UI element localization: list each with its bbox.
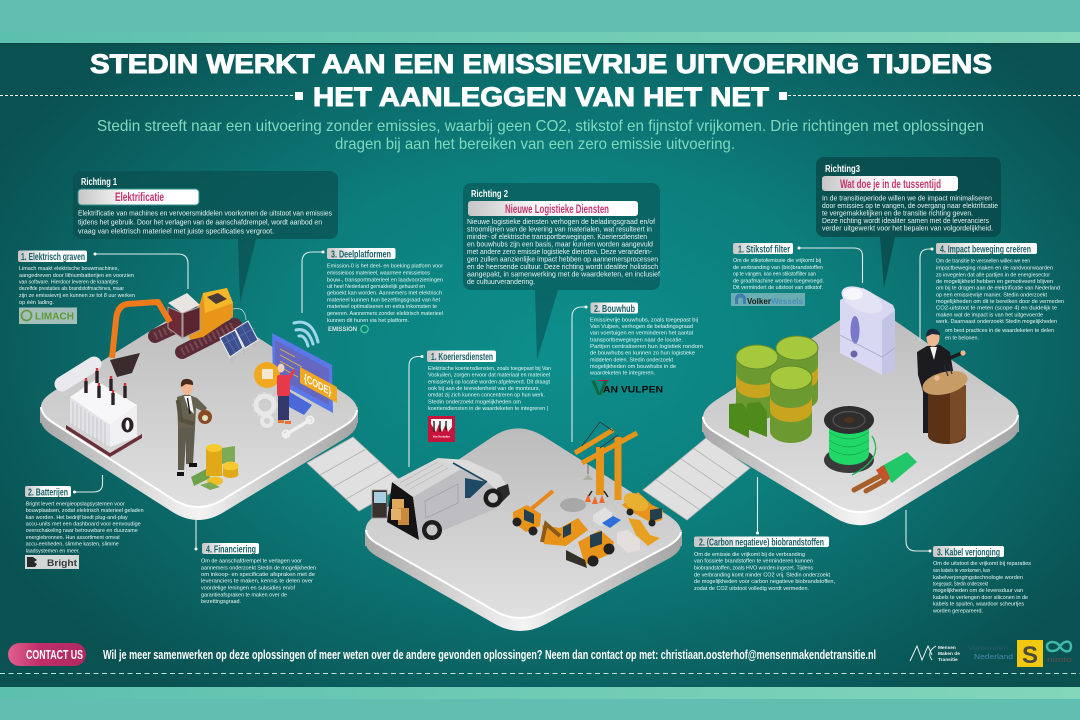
logo: Bright (25, 555, 79, 569)
footer logos: S (1022, 642, 1038, 669)
block: 3. Deelplatformen (302, 248, 443, 324)
block: 4. Financiering: garantieafspraken te maken over de (201, 592, 287, 598)
block: 1. Stikstof filter (733, 243, 862, 291)
block: 4. Impact beweging creëren: zo invegelen dat alle partijen in de energiesector (936, 272, 1050, 278)
logo: Van Vulpen (591, 377, 663, 400)
callout: richting 1: Elektrificatie (115, 192, 164, 204)
block: 3. Kabel verjonging: kabels te spuiten, waardoor scheurtjes (933, 602, 1024, 608)
icon: excavator (110, 288, 235, 377)
block: 3. Deelplatformen: geboekt kan worden. Aannemers met elektrisch (327, 291, 442, 297)
icon: wifi (294, 322, 318, 346)
block: 1. Koeriersdiensten: Stedin onderzoekt mogelijkheden om (428, 399, 521, 405)
platform: right (702, 311, 1019, 525)
block: 2. (Carbon negatieve) biobrandstoffen: 2. (Carbon negatieve) biobrandstoffen (699, 538, 824, 549)
logo: Emission (328, 325, 368, 333)
block: 4. Financiering: leveranciers te maken, kennis te delen over (201, 579, 313, 585)
block: 3. Kabel verjonging: Om de uitstoot die vrijkomt bij reparaties (933, 561, 1031, 567)
logo: Van Vulpen: AN VULPEN (603, 384, 663, 396)
block: 2. Bouwhub: van voertuigen en verminderen het aantal (590, 331, 693, 337)
callout: richting 2: Richting 2 (471, 188, 508, 200)
block: 1. Elektrisch graven (18, 250, 188, 306)
title: HET AANLEGGEN VAN HET NET (313, 82, 770, 112)
callout: richting 1: Elektrificatie van machines en vervoersmiddelen voorkomen de uitstoot van emissies (78, 208, 332, 218)
footer logos: Maken de (938, 651, 960, 657)
block: 2. Batterijen: bouwplaatsen, zodat elektrisch materieel geladen (26, 508, 144, 514)
callout: richting 3: verder uitgewerkt voor het bepalen van volgordelijkheid. (822, 224, 993, 232)
block: 4. Impact beweging creëren: om best practices in de waardeketen te delen (945, 328, 1054, 334)
callout: richting 3 (816, 157, 1001, 288)
block: 3. Kabel verjonging: kabels te verlengen door siliconen in de (933, 595, 1028, 601)
block: 1. Elektrisch graven: van software. Hierdoor leveren de kraantjes (19, 280, 118, 286)
block: 3. Deelplatformen: materieel kunnen hun bezettingsgraad van het (327, 298, 440, 304)
callout: richting 3: Wat doe je in de tussentijd (840, 179, 941, 191)
platform: middle (365, 428, 682, 631)
block: 4. Financiering: om inkoop- en specificatie afspraken met de (201, 572, 315, 578)
logo: VolkerWessels: Volker (747, 297, 771, 306)
block: 4. Financiering: voordelige leningen en subsidies en/of (201, 585, 295, 591)
block: 4. Financiering: bezettingsgraad. (201, 599, 241, 605)
block: 1. Koeriersdiensten: ook bij aan de tevredenheid van de monteurs, (428, 386, 540, 392)
callout: richting 3: te vergemakkelijken en de transitie richting geven. (822, 208, 973, 218)
block: 4. Impact beweging creëren: om bij te dragen aan de elektrificatie van Nederland (936, 286, 1060, 292)
block: 2. Batterijen: laadsystemen en meer. (26, 549, 80, 555)
block: 1. Koeriersdiensten: Elektrische koeriersdiensten, zoals toegepast bij Van (428, 366, 551, 372)
block: 4. Financiering: aannemers onderzoekt Stedin de mogelijkheden (201, 565, 316, 571)
block: 1. Stikstof filter: de verbranding van (bio)brandstoffen (733, 265, 823, 271)
block: 1. Elektrisch graven: Limach maakt elektrische bouwmachines, (19, 266, 119, 272)
block: 2. (Carbon negatieve) biobrandstoffen (694, 477, 835, 592)
callout: richting 2 (463, 183, 661, 360)
block: 4. Impact beweging creëren: mogelijkheden om dit te bereiken door de vermeden (936, 299, 1064, 305)
logo: Bright: Bright (47, 558, 78, 569)
callout: richting 2: en de heersende cultuur. Deze richting wordt idealiter holistisch (467, 262, 658, 271)
block: 3. Deelplatformen: Emission-0 is het deel- en boeking platform voor (327, 264, 443, 270)
block: 4. Impact beweging creëren: Om de transitie te versnellen willen we een (936, 258, 1030, 264)
icon: tower cranes (575, 422, 637, 500)
block: 2. Batterijen: energiebronnen. Hun assortiment omvat (26, 535, 120, 541)
icon: construction materials and cones (560, 494, 621, 528)
block: 2. Batterijen: Bright levert energieopslagsystemen voor (26, 501, 125, 507)
block: 3. Kabel verjonging: worden gerepareerd. (932, 608, 983, 614)
block: 3. Deelplatformen: uit heel Nederland gemakkelijk gehuurd en (327, 284, 425, 290)
contact button (8, 643, 86, 666)
block: 2. Bouwhub: waardeketen te integreren. (589, 371, 655, 377)
callout: richting 3: door emissies op te vangen, de overgang naar elektrificatie (822, 201, 998, 210)
callout: richting 2: aangepakt, in samenwerking met de waardeketen, en inclusief (467, 270, 661, 278)
logo: Limach (19, 308, 77, 324)
logo: Van Voskuilen: Van Voskuilen (433, 434, 451, 438)
callout: richting 2: Nieuwe Logistieke Diensten (505, 204, 609, 216)
icon: monitor with code: {CODE} (304, 372, 332, 399)
callout: richting 2: gen zullen aanzienlijke impact hebben op aannemersprocessen (467, 254, 658, 264)
block: 1. Stikstof filter: Om de stikstofemissie die vrijkomt bij (733, 258, 821, 264)
platform: left (40, 308, 358, 520)
block: 3. Deelplatformen: 3. Deelplatformen (331, 250, 391, 260)
block: 4. Impact beweging creëren: werk. Daarnaast onderzoekt Stedin mogelijkheden (935, 319, 1057, 325)
block: 2. Bouwhub: transportbewegingen naar de locatie. (590, 337, 683, 343)
block: 1. Elektrisch graven: op één lading. (19, 300, 54, 306)
block: 4. Impact beweging creëren: en te belonen. (945, 335, 979, 341)
block: 3. Deelplatformen: kunnen dit huren via het platform. (327, 318, 409, 324)
block: 4. Impact beweging creëren: impactbeweging maken en de randvoorwaarden (936, 265, 1053, 271)
callout: richting 3: Richting3 (825, 163, 860, 175)
block: 1. Elektrisch graven: dezelfde prestaties als brandstofmachines, maar (19, 286, 124, 292)
callout: richting 2: minder- of elektrische transportbewegingen. Koeriersdiensten (467, 232, 647, 241)
block: 1. Koeriersdiensten: emissievrij op locatie worden afgeleverd. Dit draagt (428, 379, 550, 385)
block: 3. Kabel verjonging: toegepast. Stedin onderzoekt (933, 582, 988, 588)
callout: richting 1: tijdens het gebruik. Door het verlagen van de aanschafdrempel, wordt aanbod en (78, 218, 322, 226)
block: 2. (Carbon negatieve) biobrandstoffen: van fossiele brandstoffen te verminderen kunnen (694, 559, 813, 565)
block: 3. Deelplatformen: emissieloos materieel, waarmee emissieloos (327, 270, 430, 276)
footer logos (0, 640, 1080, 674)
icon: fuel barrels (729, 336, 818, 443)
footer logos: Nederland (974, 654, 1013, 661)
footer logos: nimto (1047, 657, 1072, 664)
callout: richting 2: Nieuwe logistieke diensten verhogen de beladingsgraad en/of (467, 217, 656, 226)
icon: businessman with money bag (177, 379, 212, 476)
block: 1. Koeriersdiensten: koeriersdiensten in de waardeketen te integreren | (428, 406, 548, 412)
block: 1. Elektrisch graven: zijn ze emissievrij en kunnen ze tot 8 uur werken (19, 293, 135, 299)
block: 2. (Carbon negatieve) biobrandstoffen: de verbranding komt minder CO2 vrij. Stedin onderzoekt (694, 572, 830, 578)
block: 4. Impact beweging creëren: de mogelijkheid hebben en gemotiveerd blijven (936, 279, 1053, 285)
icon: cable spool (824, 406, 876, 475)
block: 4. Financiering: Om de aanschafdrempel te verlagen voor (201, 559, 302, 565)
icon: speaker at podium (917, 329, 970, 444)
callout: richting 2: en bouwhubs zijn een basis, maar kunnen worden aangevuld (467, 240, 653, 248)
block: 4. Impact beweging creëren: CO2-uitstoot te meten (scope 4) en duidelijk te (936, 306, 1057, 312)
block: 1. Koeriersdiensten: omdat zij zich kunnen concentreren op hun werk. (428, 393, 545, 399)
block: 2. (Carbon negatieve) biobrandstoffen: zodat de CO2 uitstoot volledig wordt vermeden. (694, 586, 809, 592)
logo: Emission: EMISSION (328, 327, 357, 333)
block: 2. (Carbon negatieve) biobrandstoffen: Om de emissie die vrijkomt bij de verbranding (694, 552, 805, 558)
block: 2. Batterijen: kan worden. Het bedrijf biedt plug-and-play (26, 515, 128, 521)
block: 3. Kabel verjonging: van kabels te voorkomen, kan (933, 568, 990, 574)
block: 2. Bouwhub: 2. Bouwhub (594, 304, 635, 315)
icon: cable cross-section (854, 452, 917, 491)
callout: richting 2: de cultuurverandering. (467, 277, 535, 286)
callout: richting 1: vraag van elektrisch materieel met juiste specificaties vergroot. (78, 226, 274, 236)
block: 2. Bouwhub: middelen delen. Stedin onderzoekt (590, 357, 673, 363)
block: 2. Batterijen: accu-units met een dashboard voor eenvoudige (26, 522, 141, 528)
callout: richting 2: stroomlijnen van de levering van materialen, wat resulteert in (467, 224, 652, 234)
block: 3. Kabel verjonging: 3. Kabel verjonging (937, 548, 1000, 558)
block: 2. Bouwhub (572, 302, 703, 442)
block: 1. Stikstof filter: op te vangen, kan een stikstoffilter aan (733, 272, 816, 278)
callout: richting 3: Deze richting wordt idealiter samen met de leveranciers (822, 216, 989, 225)
contact button: CONTACT US (26, 648, 83, 662)
block: 2. Bouwhub: Partijen centraliseren hun logistiek rondom (590, 344, 703, 350)
subtitle (97, 118, 984, 153)
block: 2. Batterijen: accu-eenheden, slimme kasten, slimme (26, 542, 119, 548)
block: 1. Stikstof filter: de graafmachine worden toegevoegd. (733, 278, 824, 284)
callout: richting 3: In de transitieperiode willen we de impact minimaliseren (822, 194, 992, 202)
block: 3. Kabel verjonging: mogelijkheden om de levensduur van (933, 588, 1023, 594)
block: 2. (Carbon negatieve) biobrandstoffen: biobrandstoffen, zoals HVO worden ingezet. Tijdens (694, 565, 813, 571)
stairs: middle to right (643, 438, 750, 520)
block: 2. Bouwhub: de bouwhubs en kunnen zo hun logistieke (590, 351, 695, 357)
block: 4. Impact beweging creëren: op een emissievrije manier. Stedin onderzoekt (936, 292, 1047, 298)
block: 1. Koeriersdiensten: Voskuilen, zorgen ervoor dat materiaal en materieel (428, 373, 550, 379)
logo: Van Vulpen: V (591, 377, 608, 400)
block: 4. Impact beweging creëren: 4. Impact beweging creëren (940, 244, 1031, 256)
logo: Van Voskuilen (428, 416, 455, 442)
logo: VolkerWessels: Wessels (771, 297, 804, 306)
icon: filter device (837, 281, 895, 375)
icon: construction machines (512, 489, 663, 568)
title (0, 49, 1080, 112)
stairs: left to middle (307, 437, 405, 511)
block: 1. Koeriersdiensten (409, 350, 551, 467)
block: 2. Batterijen: overschakeling naar betrouwbare en duurzame (26, 528, 138, 534)
subtitle: dragen bij aan het bereiken van een zero emissie uitvoering. (335, 136, 735, 153)
callout: richting 2: met andere zero emissie logistieke diensten. Deze veranderin- (467, 247, 653, 256)
block: 3. Deelplatformen: bouw-, transportmaterieel en laadvoorzieningen (327, 277, 443, 283)
footer logos: Verbonden (968, 646, 1008, 652)
block: 1. Elektrisch graven: aangedreven door lithiumbatterijen en voorzien (19, 273, 134, 279)
icon: coins and cash (191, 444, 238, 490)
subtitle: Stedin streeft naar een uitvoering zonder emissies, waarbij geen CO2, stikstof en fijnstof vrijkomen. Drie richtingen met oplossingen (97, 118, 984, 135)
block: 3. Kabel verjonging: kabelverjongingstechnologie worden (933, 575, 1023, 581)
block: 1. Elektrisch graven: 1. Elektrisch graven (21, 252, 85, 263)
block: 2. Bouwhub: Van Vulpen, verhogen de beladingsgraad (590, 324, 693, 330)
icon: monitor with code (272, 333, 337, 415)
block: 2. Bouwhub: mogelijkheden om bouwhubs in de (590, 364, 676, 370)
block: 3. Deelplatformen: materieel optimaliseren en extra inkomsten te (327, 304, 437, 310)
logo: VolkerWessels (731, 293, 805, 306)
block: 1. Stikstof filter: 1. Stikstof filter (738, 244, 790, 256)
block: 2. Batterijen (25, 475, 144, 555)
footer logos: Mensen (938, 645, 956, 651)
logo: Limach: LIMACH (35, 312, 74, 322)
title: STEDIN WERKT AAN EEN EMISSIEVRIJE UITVOERING TIJDENS (90, 49, 992, 79)
block: 3. Kabel verjonging (906, 510, 1031, 614)
footer logos: Transitie (938, 657, 958, 663)
block: 4. Financiering: 4. Financiering (206, 544, 256, 556)
block: 2. (Carbon negatieve) biobrandstoffen: de mogelijkheden voor carbon negatieve biobrandstoffen, (694, 579, 835, 585)
block: 4. Impact beweging creëren (920, 243, 1064, 341)
icon: programmer with gears and wrench (253, 362, 314, 438)
callout: richting 1 (73, 171, 338, 303)
icon: transformer (62, 364, 142, 457)
block: 4. Impact beweging creëren: maken wat de impact is van het uitgevoerde (936, 312, 1043, 318)
icon: delivery van (372, 458, 510, 540)
icon: solar panels (220, 308, 258, 362)
block: 2. Batterijen: 2. Batterijen (28, 488, 68, 498)
block: 4. Financiering (194, 520, 316, 605)
block: 1. Koeriersdiensten: 1. Koeriersdiensten (431, 352, 493, 363)
callout: richting 1: Richting 1 (81, 176, 117, 188)
block: 1. Stikstof filter: Dit vermindert de uitstoot van stikstof. (733, 285, 823, 291)
block: 3. Deelplatformen: generen. Aannemers zonder elektrisch materieel (327, 311, 443, 317)
block: 2. Bouwhub: Emissievrije bouwhubs, zoals toegepast bij (590, 317, 698, 323)
